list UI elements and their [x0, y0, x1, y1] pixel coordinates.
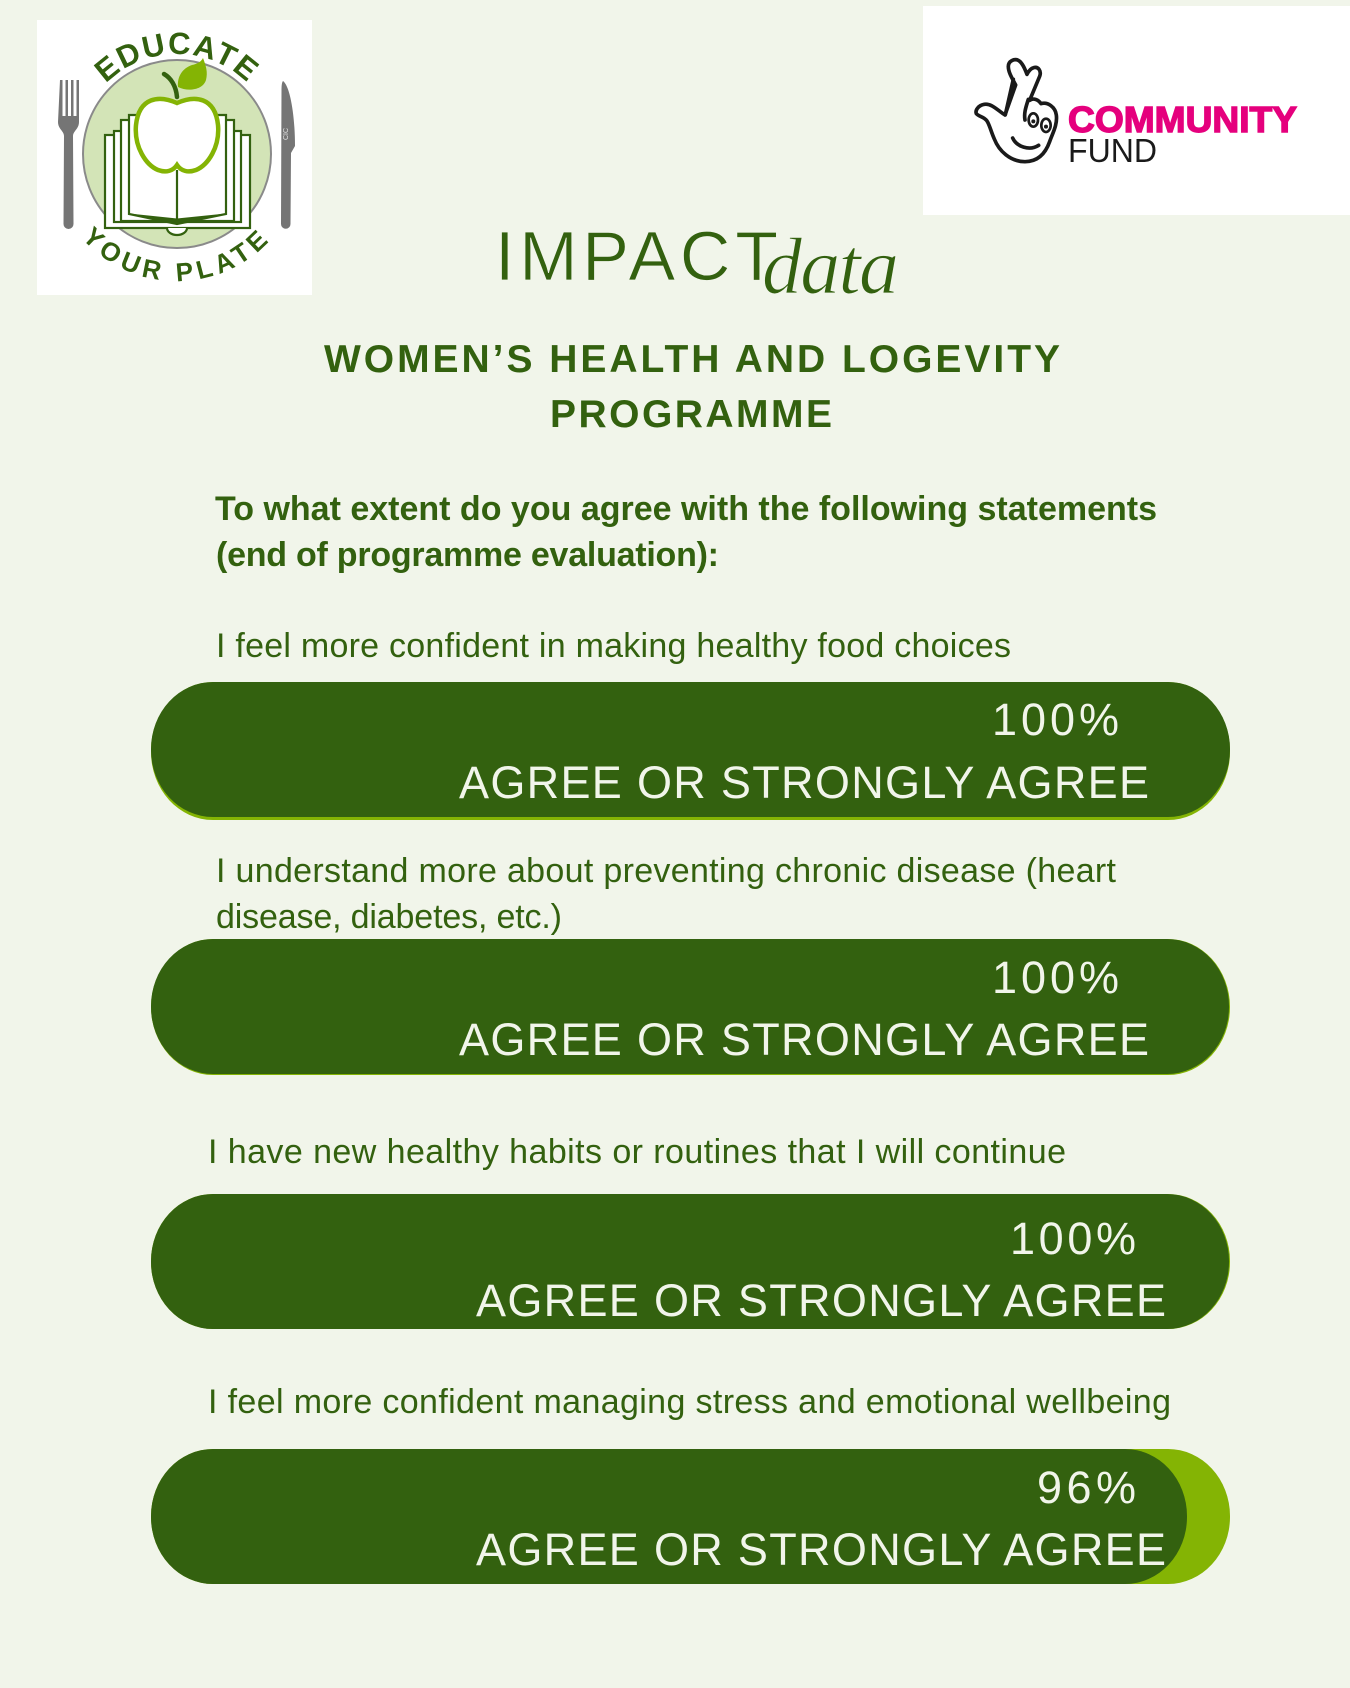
- bar 3: 100%: 100%: [1010, 1213, 1136, 1264]
- statement 2: I understand more about preventing chronic disease (heart: [216, 852, 1117, 890]
- text: EDUCATE: EDUCATE: [94, 32, 260, 82]
- bar 2: 100%: AGREE OR STRONGLY AGREE: [459, 1014, 1149, 1065]
- bar 2: 100%: 100%: [992, 952, 1119, 1003]
- bar 4: 96%: 96%: [1037, 1462, 1136, 1513]
- text: FUND: FUND: [1068, 132, 1157, 169]
- icon: crossed fingers hand: [976, 60, 1057, 162]
- statement 1: I feel more confident in making healthy food choices: [216, 627, 1011, 665]
- statement 2: disease, diabetes, etc.): [216, 898, 562, 936]
- statement 4: I feel more confident managing stress and emotional wellbeing: [208, 1383, 1171, 1421]
- heading: programme title: WOMEN’S HEALTH AND LOGEVITY: [324, 338, 1060, 381]
- bar 1: 100%: 100%: [992, 694, 1119, 745]
- bar 1: 100%: [151, 682, 1230, 820]
- logo: Educate Your Plate: [37, 20, 312, 295]
- bar 4: 96%: AGREE OR STRONGLY AGREE: [476, 1524, 1166, 1575]
- logo: Community Fund: [923, 6, 1350, 215]
- heading: IMPACT data: [495, 217, 899, 311]
- text: YOUR PLATE: YOUR PLATE: [86, 226, 268, 282]
- statement 3: I have new healthy habits or routines that I will continue: [208, 1133, 1066, 1171]
- bar 3: 100%: AGREE OR STRONGLY AGREE: [476, 1275, 1166, 1326]
- heading: IMPACT data: IMPACT: [495, 217, 778, 295]
- text: COMMUNITY: COMMUNITY: [1068, 99, 1297, 140]
- icon: knife: [281, 81, 295, 229]
- icon: knife: CIC: [283, 128, 290, 140]
- bar 1: 100%: AGREE OR STRONGLY AGREE: [459, 757, 1149, 808]
- icon: fork: [58, 80, 79, 229]
- icon: open book: [105, 115, 250, 235]
- statement 2: [216, 852, 1117, 936]
- text: survey question: (end of programme evaluation):: [216, 536, 719, 574]
- text: survey question: To what extent do you agree with the following statements: [215, 490, 1157, 528]
- bar 4: 96%: [151, 1449, 1230, 1584]
- text: survey question: [215, 490, 1157, 574]
- icon: apple: [136, 58, 218, 171]
- bar 2: 100%: [151, 939, 1230, 1075]
- heading: IMPACT data: data: [762, 223, 899, 311]
- heading: programme title: PROGRAMME: [550, 393, 832, 436]
- bar 3: 100%: [151, 1194, 1230, 1329]
- heading: programme title: [324, 338, 1060, 436]
